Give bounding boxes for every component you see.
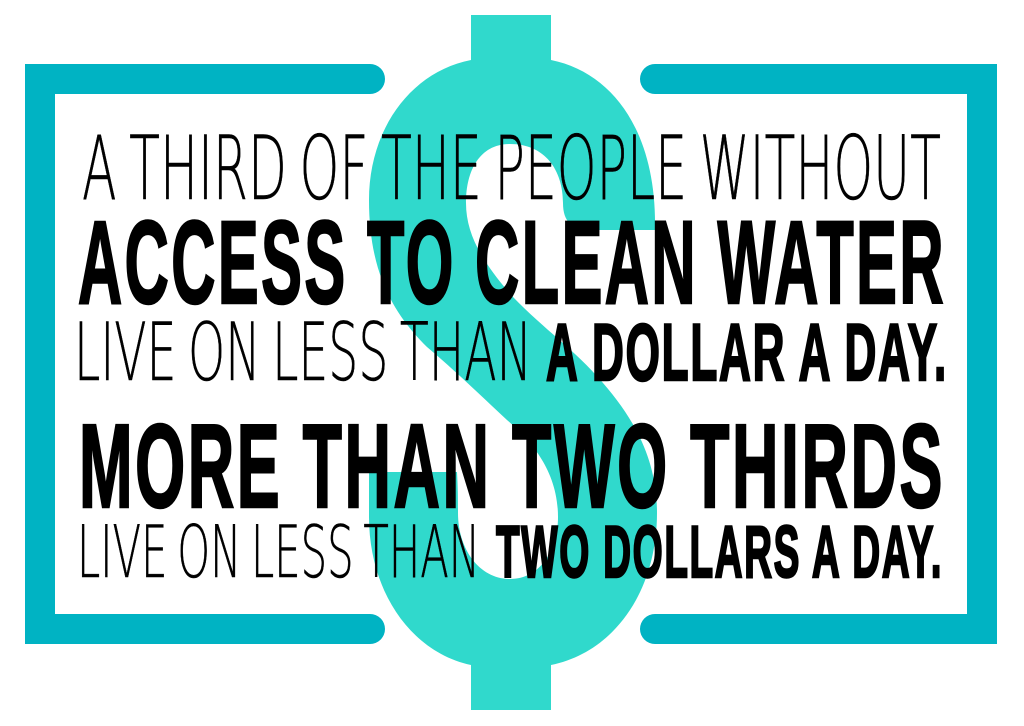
line 5 thin: live on less than: LIVE ON LESS THAN — [77, 510, 480, 594]
icon: large dollar sign — [369, 15, 657, 710]
line 3 thin: live on less than: LIVE ON LESS THAN — [74, 306, 532, 399]
right bracket frame — [640, 64, 997, 644]
left bracket frame — [25, 64, 385, 644]
text block: statistics — [74, 117, 948, 594]
